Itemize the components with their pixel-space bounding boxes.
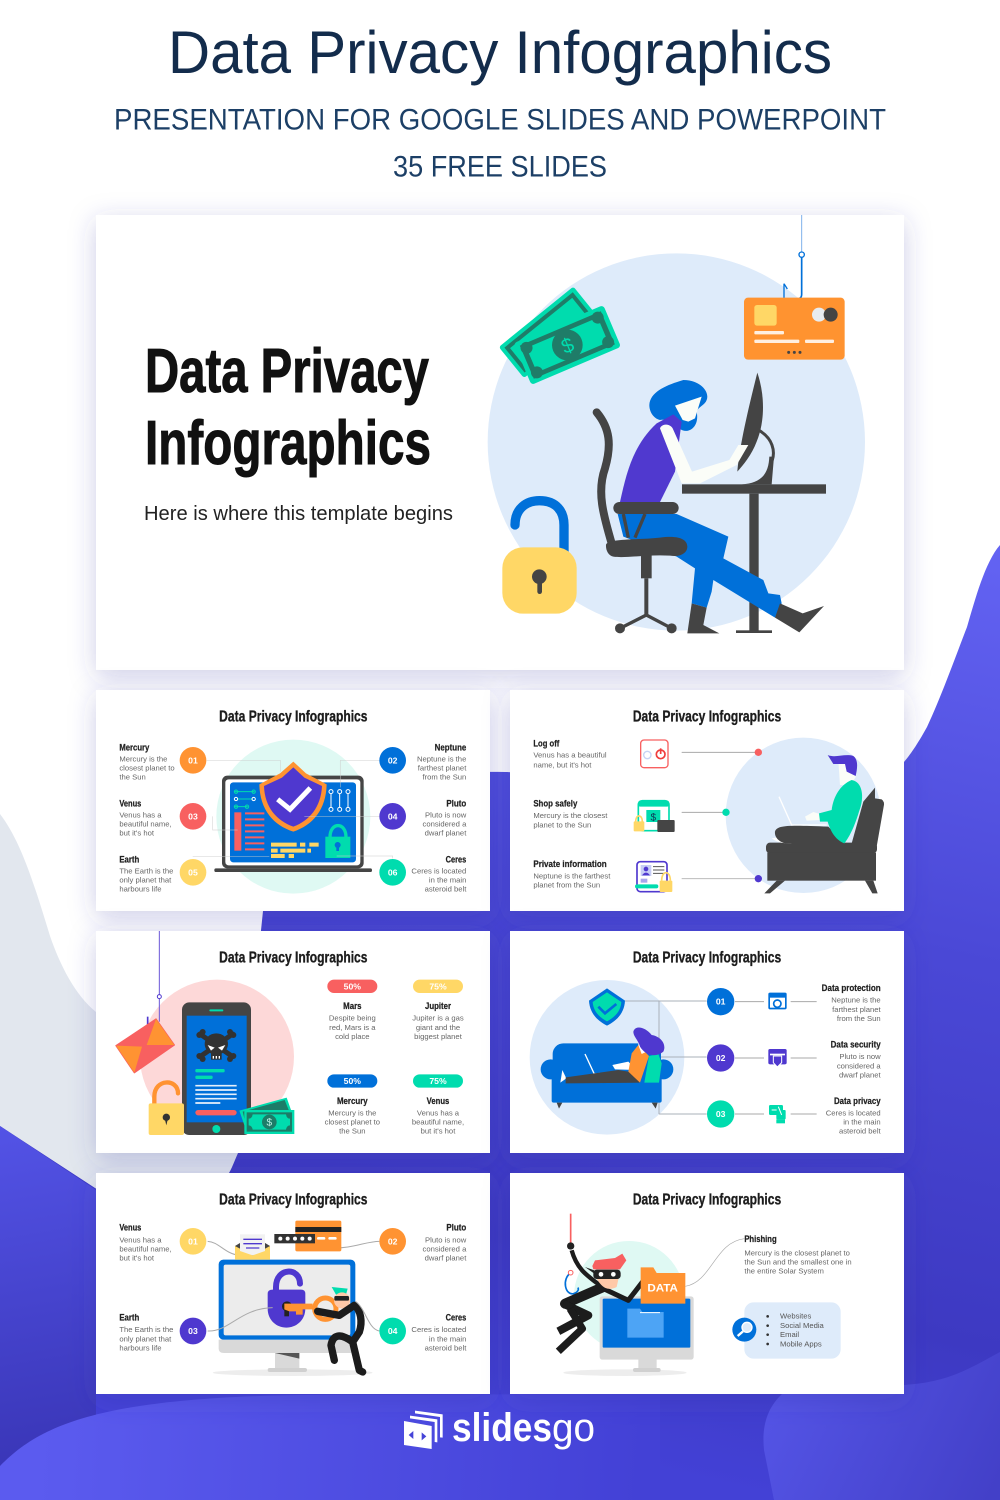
subtitle line 1: PRESENTATION FOR GOOGLE SLIDES AND POWERPOINT (114, 104, 886, 136)
illustration: person on sofa with shield (530, 980, 707, 1135)
point 05 Earth: 05 (188, 867, 198, 877)
point 02 Neptune (379, 742, 467, 782)
tip: Log off (533, 738, 762, 769)
page title: Data Privacy Infographics (168, 19, 832, 86)
point 03 Venus: but it's hot (119, 829, 155, 838)
point 02 Neptune: Neptune (435, 742, 466, 752)
tip: Shop safely: $ (651, 812, 657, 823)
point 03 Earth: Earth (119, 1313, 140, 1323)
tip: Shop safely: planet to the Sun (533, 820, 591, 829)
icon: envelope with message (235, 1234, 270, 1260)
panel: cover slide (96, 215, 904, 670)
stat: Venus 75% (412, 1074, 464, 1136)
point 06 Ceres: 06 (388, 867, 398, 877)
point 02 Pluto (379, 1223, 467, 1263)
slide title: Data Privacy Infographics (633, 709, 781, 726)
list box (732, 1302, 841, 1359)
data folder: DATA (647, 1282, 678, 1294)
step 01 Data protection: Data protection (822, 983, 881, 993)
point 04 Pluto: Pluto (446, 798, 467, 808)
illustration: phone with skull: $ (267, 1118, 273, 1129)
point 05 Earth: The Earth is the (119, 866, 173, 875)
stat: Jupiter 75%: Jupiter is a gas (412, 1014, 464, 1023)
panel: slide with thief unlocking monitor (96, 1173, 490, 1394)
point 02 Pluto: considered a (422, 1245, 467, 1254)
point 01 Mercury: Mercury is the (119, 754, 167, 763)
icon: card with password (274, 1221, 341, 1251)
point 03 Earth: The Earth is the (119, 1325, 173, 1334)
step 01 Data protection (707, 983, 882, 1023)
point 04 Ceres: in the main (429, 1334, 466, 1343)
illustration: thief stealing data (558, 1214, 694, 1376)
point 01 Venus: Venus (119, 1223, 141, 1233)
point 01 Mercury: Mercury (119, 742, 150, 752)
step 01 Data protection: 01 (716, 997, 726, 1007)
point 01 Venus: Venus has a (119, 1235, 162, 1244)
list box: Websites (780, 1312, 812, 1321)
subtitle line 2: 35 FREE SLIDES (393, 150, 607, 184)
point 01 Mercury: closest planet to (119, 764, 175, 773)
cover subheading: Here is where this template begins (144, 502, 453, 525)
stat: Mars 50%: Mars (343, 1001, 361, 1011)
stat: Mercury 50% (325, 1074, 380, 1136)
step 03 Data privacy: asteroid belt (839, 1127, 882, 1136)
step 03 Data privacy: Data privacy (834, 1096, 881, 1106)
stat: Mars 50%: 50% (344, 981, 361, 991)
stat: Jupiter 75%: giant and the (416, 1023, 460, 1032)
point 04 Pluto: 04 (388, 811, 398, 821)
point 01 Venus: beautiful name, (119, 1245, 172, 1254)
stat: Mars 50% (327, 980, 377, 1041)
text: Phishing: the Sun and the smallest one in (744, 1257, 852, 1266)
icon: banknotes: $ (558, 333, 578, 359)
point 06 Ceres: Ceres is located (411, 866, 466, 875)
point 04 Ceres (379, 1313, 467, 1352)
point 01 Mercury (119, 742, 206, 782)
step 02 Data security: dwarf planet (839, 1070, 882, 1079)
point 03 Venus (119, 798, 206, 838)
text: Phishing: Phishing (744, 1234, 777, 1244)
cover illustration (488, 215, 865, 633)
point 05 Earth: only planet that (119, 876, 172, 885)
point 03 Earth (119, 1313, 206, 1352)
connector (685, 1239, 744, 1286)
text: Phishing: the entire Solar System (744, 1266, 824, 1275)
point 02 Neptune: from the Sun (422, 773, 466, 782)
tip: Log off: Venus has a beautiful (533, 751, 607, 760)
illustration: person in armchair (726, 738, 884, 893)
point 04 Pluto (379, 798, 467, 838)
step 01 Data protection: farthest planet (832, 1005, 882, 1014)
tip: Shop safely (533, 799, 730, 832)
stat: Venus 75%: 75% (429, 1076, 447, 1086)
tip: Private information: Neptune is the farthest (533, 871, 611, 880)
stat: Mars 50%: cold place (335, 1032, 370, 1041)
tip: Private information: Private information (533, 859, 607, 869)
point 05 Earth (119, 854, 206, 894)
point 04 Ceres: asteroid belt (425, 1343, 467, 1352)
point 02 Neptune: farthest planet (418, 764, 467, 773)
point 02 Pluto: 02 (388, 1236, 398, 1246)
point 03 Earth: only planet that (119, 1334, 172, 1343)
point 01 Venus: 01 (188, 1236, 198, 1246)
slide title: Data Privacy Infographics (219, 709, 368, 726)
point 01 Mercury: 01 (188, 755, 198, 765)
logo: slidesgo: go (552, 1406, 595, 1450)
point 01 Venus (119, 1223, 206, 1263)
tip: Shop safely: Mercury is the closest (533, 811, 608, 820)
cover heading: Infographics (145, 409, 431, 478)
tip: Log off: name, but it's hot (533, 760, 592, 769)
stat: Venus 75%: but it's hot (421, 1127, 456, 1136)
illustration: person at desk (597, 373, 826, 633)
stat: Mercury 50%: the Sun (339, 1127, 366, 1136)
slide title: Data Privacy Infographics (219, 1191, 368, 1208)
illustration: laptop and shield (193, 740, 393, 894)
data folder (641, 1267, 685, 1304)
slide title: Data Privacy Infographics (219, 949, 368, 966)
list box: Mobile Apps (780, 1339, 822, 1348)
panel: slide with laptop and six points (96, 690, 490, 911)
panel: phishing slide (510, 1173, 904, 1394)
logo: slidesgo: slides (452, 1406, 552, 1450)
point 06 Ceres (379, 854, 467, 894)
step 01 Data protection: from the Sun (837, 1014, 881, 1023)
tip: Private information: planet from the Sun (533, 881, 600, 890)
point 01 Mercury: the Sun (119, 773, 146, 782)
stat: Venus 75%: Venus (427, 1096, 449, 1106)
point 03 Venus: 03 (188, 811, 198, 821)
stat: Venus 75%: Venus has a (417, 1108, 460, 1117)
stat: Mercury 50%: Mercury (337, 1096, 368, 1106)
point 03 Venus: Venus has a (119, 810, 162, 819)
stat: Mercury 50%: Mercury is the (328, 1108, 376, 1117)
list box: Social Media (780, 1321, 825, 1330)
stat: Jupiter 75%: Jupiter (425, 1001, 451, 1011)
point 04 Ceres: Ceres (446, 1313, 466, 1323)
icon: open padlock (502, 501, 577, 614)
stat: Jupiter 75%: 75% (429, 981, 447, 991)
stat: Mercury 50%: closest planet to (325, 1117, 380, 1126)
tip: Shop safely: Shop safely (533, 799, 578, 809)
point 01 Venus: but it's hot (119, 1254, 155, 1263)
step 02 Data security: 02 (716, 1053, 726, 1063)
slide title: Data Privacy Infographics (633, 1191, 781, 1208)
illustration: phone with skull (116, 931, 294, 1135)
stat: Mars 50%: red, Mars is a (329, 1023, 376, 1032)
step 02 Data security: Pluto is now (839, 1052, 881, 1061)
point 04 Pluto: dwarf planet (425, 829, 467, 838)
point 02 Pluto: Pluto is now (425, 1235, 467, 1244)
point 05 Earth: harbours life (119, 885, 161, 894)
point 03 Venus: Venus (119, 798, 141, 808)
cover heading: Data Privacy (145, 337, 429, 406)
point 06 Ceres: in the main (429, 876, 466, 885)
illustration: monitor, padlock and thief (208, 1241, 379, 1376)
point 04 Ceres: Ceres is located (411, 1325, 466, 1334)
panel: slide with sofa and data protection steps (510, 931, 904, 1153)
cover heading (145, 337, 431, 478)
step 03 Data privacy: Ceres is located (826, 1108, 881, 1117)
point 06 Ceres: asteroid belt (425, 885, 467, 894)
stat: Jupiter 75% (412, 980, 464, 1041)
text: Phishing (744, 1234, 852, 1275)
step 02 Data security (707, 1039, 882, 1079)
list box: Email (780, 1330, 799, 1339)
step 02 Data security: considered a (837, 1061, 881, 1070)
point 04 Pluto: Pluto is now (425, 810, 467, 819)
panel: slide with hacked phone and percentages (96, 931, 490, 1153)
icon: hooked credit card (744, 215, 845, 360)
step 03 Data privacy: 03 (716, 1109, 726, 1119)
point 04 Pluto: considered a (422, 820, 467, 829)
text: Phishing: Mercury is the closest planet to (744, 1248, 850, 1257)
point 05 Earth: Earth (119, 854, 140, 864)
point 02 Pluto: dwarf planet (425, 1254, 467, 1263)
point 03 Earth: harbours life (119, 1343, 161, 1352)
point 03 Earth: 03 (188, 1326, 198, 1336)
point 04 Ceres: 04 (388, 1326, 398, 1336)
step 01 Data protection: Neptune is the (831, 996, 881, 1005)
logo: slidesgo (404, 1406, 595, 1450)
point 02 Neptune: Neptune is the (417, 754, 466, 763)
panel: slide with three tips and person in armchair (510, 690, 904, 911)
point 02 Pluto: Pluto (446, 1223, 467, 1233)
point 02 Neptune: 02 (388, 755, 398, 765)
stat: Mercury 50%: 50% (344, 1076, 361, 1086)
icon: banknotes (499, 287, 621, 385)
step 03 Data privacy (707, 1096, 882, 1136)
tip: Private information (533, 859, 762, 892)
slide title: Data Privacy Infographics (633, 949, 781, 966)
stat: Venus 75%: beautiful name, (412, 1117, 464, 1126)
point 06 Ceres: Ceres (446, 854, 466, 864)
step 03 Data privacy: in the main (843, 1118, 881, 1127)
tip: Log off: Log off (533, 738, 560, 748)
step 02 Data security: Data security (831, 1039, 881, 1049)
stat: Jupiter 75%: biggest planet (414, 1032, 463, 1041)
stat: Mars 50%: Despite being (329, 1014, 376, 1023)
point 03 Venus: beautiful name, (119, 820, 172, 829)
